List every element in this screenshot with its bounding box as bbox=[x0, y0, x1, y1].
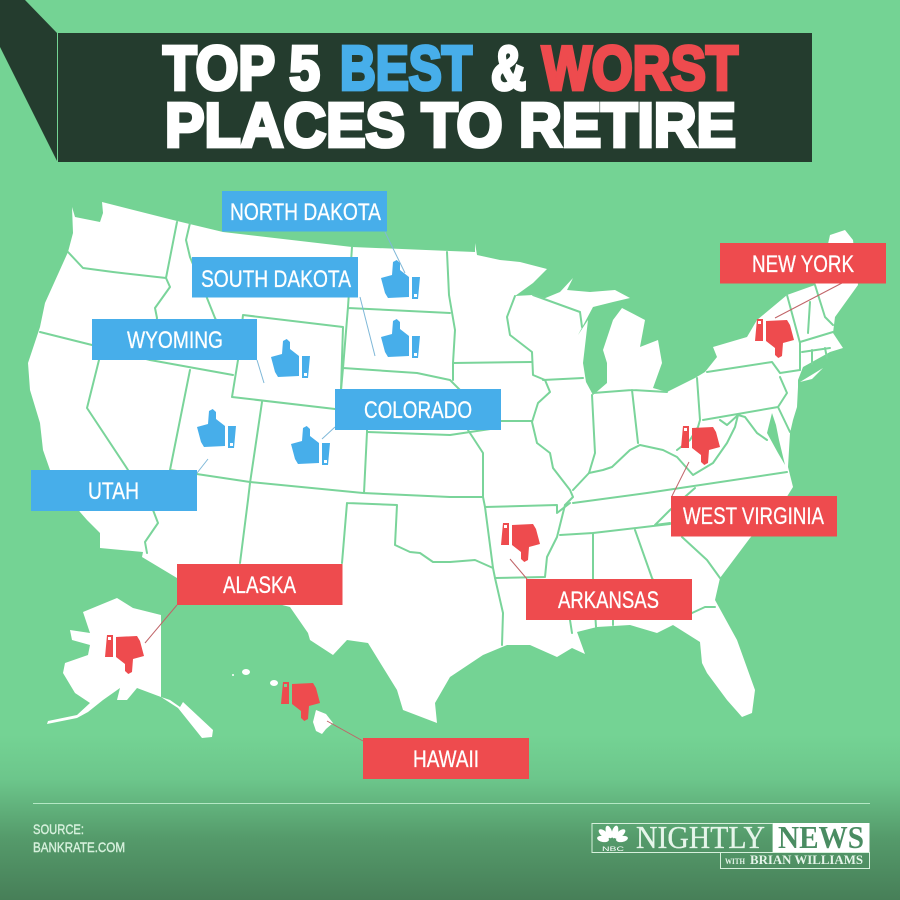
thumbs up: colorado bbox=[291, 426, 330, 465]
source text: BANKRATE.COM bbox=[33, 839, 125, 855]
chesapeake bay bbox=[767, 413, 785, 465]
label: north dakota: NORTH DAKOTA bbox=[230, 199, 381, 226]
leader lines bbox=[145, 232, 842, 741]
logo frame bbox=[592, 824, 773, 852]
logo subtitle: BRIAN WILLIAMS bbox=[750, 852, 863, 867]
label: wyoming bbox=[92, 319, 257, 360]
long island bbox=[800, 368, 823, 382]
label: colorado: COLORADO bbox=[364, 397, 472, 424]
label: west virginia bbox=[671, 496, 837, 536]
footer divider bbox=[33, 803, 870, 804]
title line 1 bbox=[163, 34, 738, 104]
state borders bbox=[40, 222, 833, 645]
thumbs up: north dakota bbox=[381, 260, 420, 299]
label: arkansas: ARKANSAS bbox=[558, 587, 659, 614]
footer gradient bbox=[0, 735, 900, 900]
title line 1: BEST bbox=[340, 34, 472, 104]
thumbs down: alaska bbox=[105, 635, 144, 674]
label: utah bbox=[31, 470, 197, 511]
logo wordmark: nightly: NIGHTLY bbox=[636, 819, 765, 855]
logo news box bbox=[773, 823, 870, 852]
icon: nbc peacock: NBC bbox=[602, 847, 625, 853]
logo subtitle: WITH bbox=[725, 857, 746, 866]
thumbs down: hawaii bbox=[281, 682, 320, 721]
thumbs up: wyoming bbox=[271, 339, 310, 378]
thumbs up: south dakota bbox=[381, 319, 420, 358]
thumbs down: new york bbox=[755, 319, 794, 358]
banner fold bbox=[0, 0, 57, 161]
source text: SOURCE: bbox=[33, 821, 84, 837]
label: new york: NEW YORK bbox=[752, 251, 854, 278]
label: alaska bbox=[177, 564, 342, 605]
label: alaska: ALASKA bbox=[223, 572, 296, 599]
banner bar bbox=[58, 33, 812, 162]
title line 1: TOP 5 bbox=[163, 34, 320, 104]
label: north dakota bbox=[222, 191, 387, 232]
map: contiguous United States bbox=[28, 202, 858, 723]
thumbs down: west virginia bbox=[681, 426, 720, 465]
title line 1: WORST bbox=[542, 34, 738, 104]
icon: nbc peacock bbox=[597, 825, 628, 853]
label: hawaii bbox=[363, 738, 529, 779]
thumbs up: utah bbox=[197, 409, 236, 448]
map: alaska bbox=[47, 598, 213, 738]
label: new york bbox=[720, 243, 886, 284]
thumbs down: arkansas bbox=[501, 523, 540, 562]
label: arkansas bbox=[526, 579, 692, 620]
source text bbox=[33, 821, 125, 855]
map: hawaii bbox=[232, 669, 333, 734]
label: south dakota: SOUTH DAKOTA bbox=[201, 266, 351, 293]
label: south dakota bbox=[192, 257, 358, 298]
logo subtitle frame bbox=[720, 852, 870, 868]
title line 2: PLACES TO RETIRE bbox=[165, 92, 736, 160]
title banner bbox=[0, 0, 812, 162]
label: utah: UTAH bbox=[88, 478, 139, 505]
label: west virginia: WEST VIRGINIA bbox=[683, 503, 824, 530]
label: wyoming: WYOMING bbox=[127, 327, 223, 354]
title line 1: & bbox=[491, 34, 526, 104]
logo: nbc nightly news bbox=[592, 819, 870, 868]
label: colorado bbox=[335, 389, 501, 430]
label: hawaii: HAWAII bbox=[413, 746, 479, 773]
logo wordmark: news: NEWS bbox=[778, 819, 864, 855]
